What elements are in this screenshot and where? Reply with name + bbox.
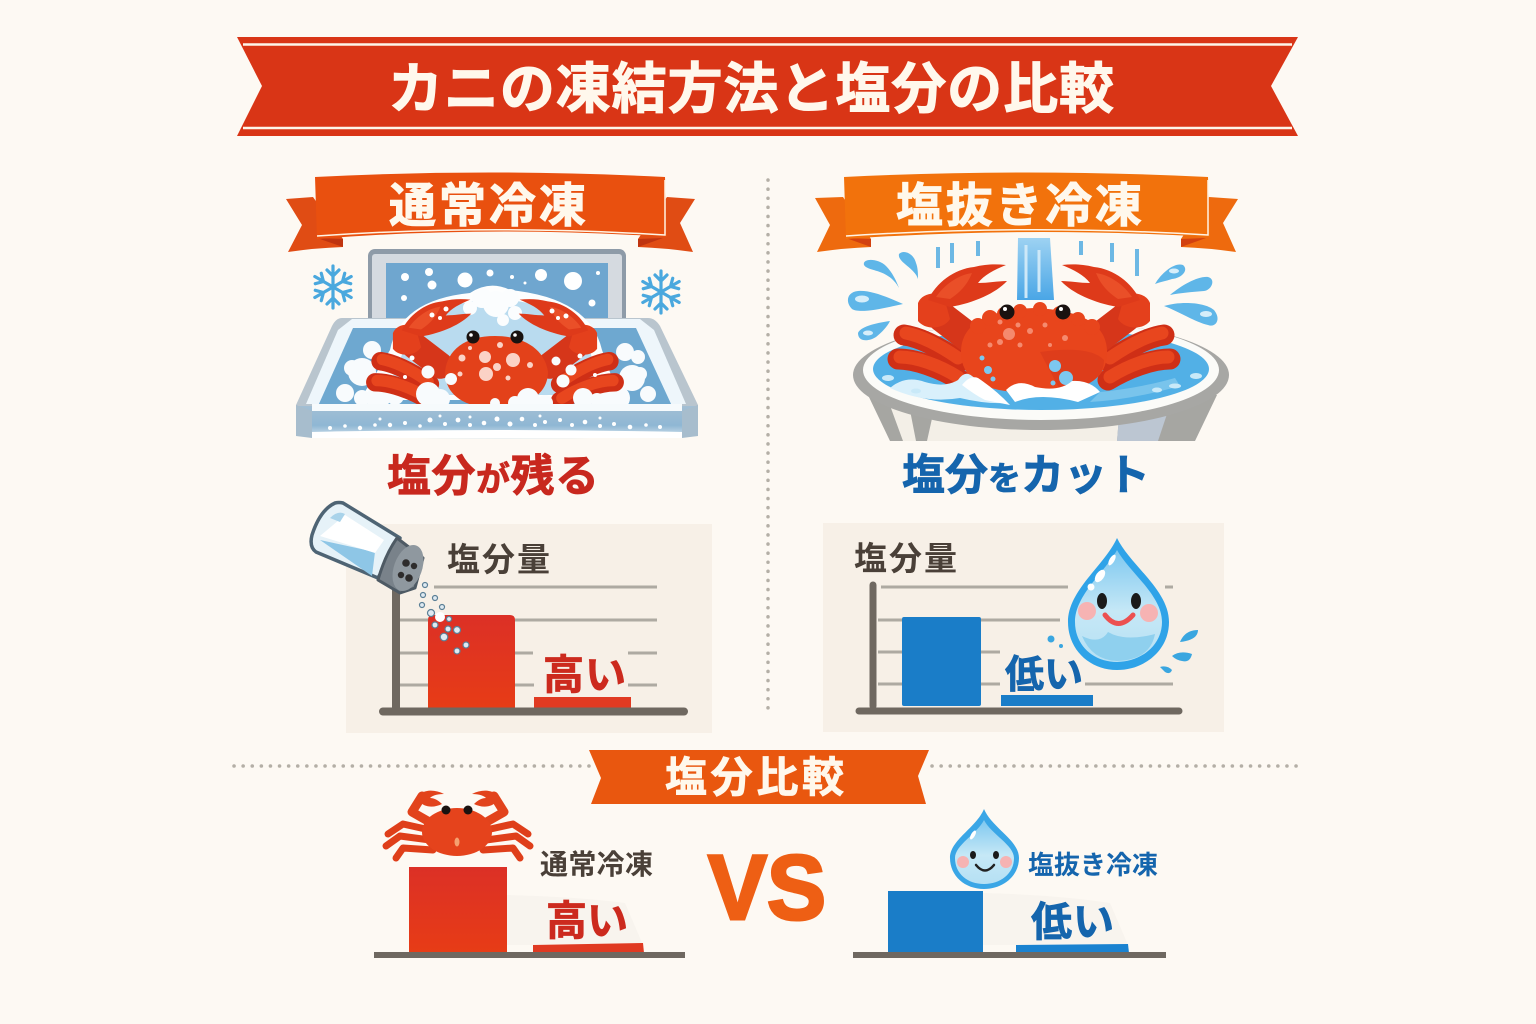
bowl rim [853,320,1229,430]
icon: water drop character [1048,538,1198,673]
value: 高い [546,898,628,944]
chart panel: 通常冷凍 salt amount [346,524,712,733]
red crab [898,264,1170,393]
water stream [1017,238,1054,300]
chart panel: 塩抜き冷凍 salt amount [823,523,1224,732]
label backing [507,895,643,945]
bowl body [868,395,1217,441]
illustration: bowl, water and crab [848,238,1229,441]
ribbon: 塩抜き冷凍 [815,172,1238,252]
baseline [853,952,1166,958]
illustration: freezer with snow crab [296,249,698,438]
label: 塩抜き冷凍 [1028,850,1158,880]
title text: カニの凍結方法と塩分の比較 [388,58,1114,120]
value label: 低い [1005,654,1083,697]
mini water drop icon [950,809,1019,889]
chart heading: 塩分量 [447,541,552,578]
ribbon text: 通常冷凍 [389,179,586,232]
freezer tub [296,318,698,438]
water surface [873,328,1209,410]
front snow [416,356,604,411]
VS mark: VS [708,837,826,939]
label: 通常冷凍 [540,849,653,880]
bar: high [902,617,981,706]
icon: snowflake left [312,266,354,308]
icon: snowflake right [640,271,682,313]
bar: high [428,615,515,708]
foam [882,373,1202,405]
bar: high [409,867,507,953]
baseline [374,952,685,958]
icon: salt shaker [311,502,429,595]
axes [383,590,684,712]
banner: 塩分比較 [589,750,929,804]
comparison: 塩抜き冷凍 [853,809,1166,958]
title banner [237,37,1298,136]
banner text: 塩分比較 [665,754,844,801]
freezer lid [368,249,626,339]
back snow mound [360,286,620,400]
falling salt [420,582,469,654]
ribbon text: 塩抜き冷凍 [896,179,1142,232]
snow crab [375,299,615,408]
label backing [983,893,1128,945]
section divider: horizontal dotted left [234,764,590,768]
bar: high [888,891,983,953]
value: 低い [1031,899,1114,945]
bar: small [534,697,631,708]
freezer front face [296,406,698,438]
value label: 高い [543,652,626,698]
mini crab icon [386,791,530,858]
falling dashes [938,241,1137,276]
comparison: 通常冷凍 [374,791,685,958]
statement: 塩分が残る: 塩分が残る [387,452,599,501]
bar: small [1001,695,1093,706]
ribbon: 通常冷凍 [286,172,695,252]
bar: small [1016,944,1129,953]
statement: 塩分をカット: 塩分をカット [902,452,1150,500]
section divider: horizontal dotted right [932,764,1300,768]
divider: vertical dotted [766,180,770,716]
bar: small [533,943,644,953]
axes [859,585,1179,711]
splash droplets [848,252,1218,340]
chart heading: 塩分量 [854,540,959,577]
snow piles [336,341,656,410]
